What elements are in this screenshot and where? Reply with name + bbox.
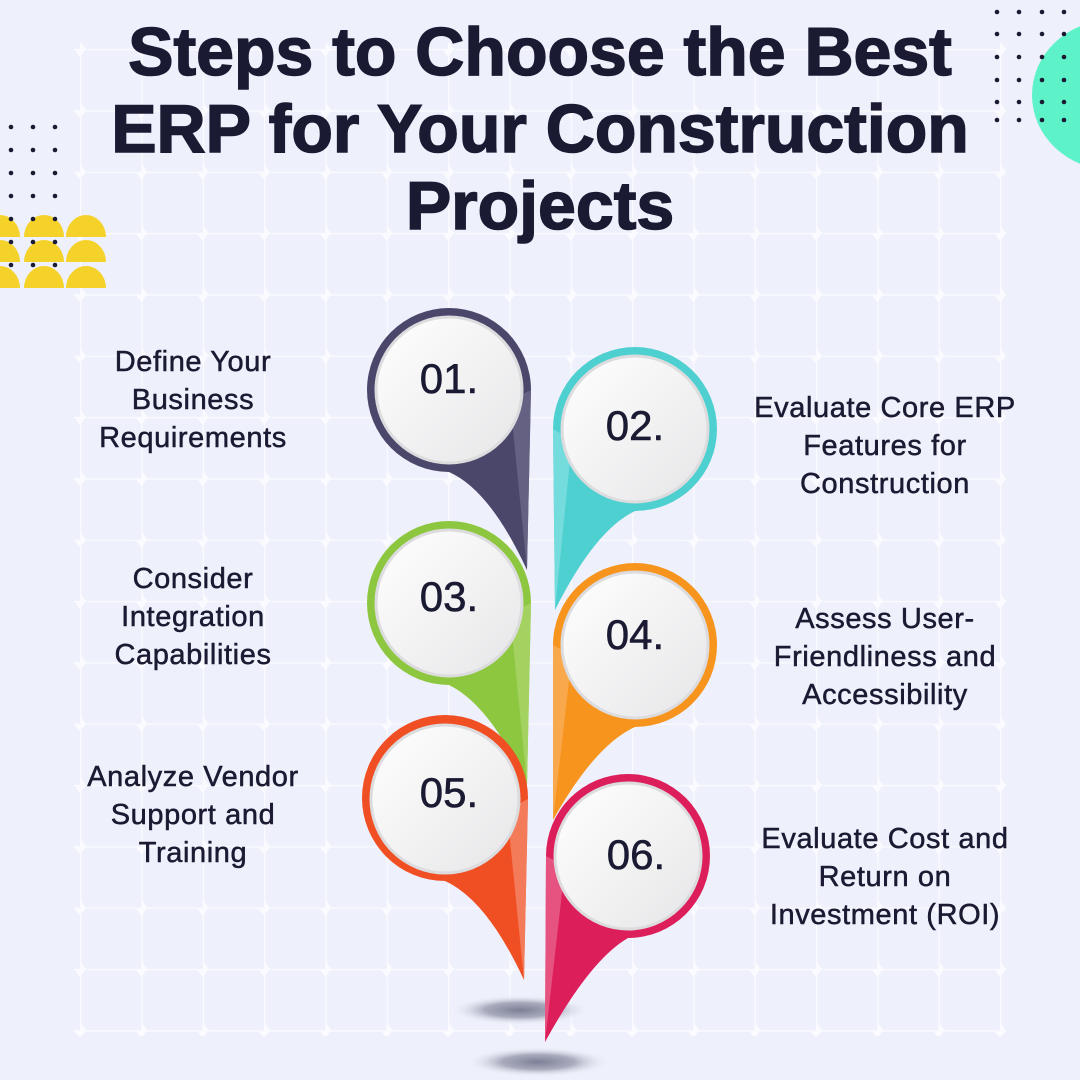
text: step 2: Construction bbox=[800, 468, 970, 500]
pin 02 bbox=[553, 347, 717, 610]
text: step 4 bbox=[774, 603, 996, 711]
text: step 6: Return on bbox=[819, 861, 951, 893]
text: step 6 bbox=[761, 823, 1009, 931]
text: step 5: Analyze Vendor bbox=[87, 761, 299, 793]
pin 03 bbox=[367, 521, 531, 785]
pin 02: 02. bbox=[606, 402, 664, 449]
text: step 3: Capabilities bbox=[114, 639, 272, 671]
pin 05: 05. bbox=[420, 769, 478, 816]
pin 04: 04. bbox=[606, 611, 664, 658]
text: step 5: Support and bbox=[111, 799, 275, 831]
text: step 6: Investment (ROI) bbox=[770, 899, 1000, 931]
text: step 5: Training bbox=[139, 837, 247, 869]
title: ERP for Your Construction bbox=[111, 91, 969, 167]
pin 05 bbox=[362, 715, 528, 980]
shadows bbox=[450, 995, 610, 1077]
text: step 1: Define Your bbox=[115, 346, 271, 378]
text: step 4: Friendliness and bbox=[774, 641, 996, 673]
text: step 3: Integration bbox=[121, 601, 265, 633]
text: step 1: Business bbox=[132, 384, 254, 416]
text: step 2: Features for bbox=[803, 430, 967, 462]
text: step 3: Consider bbox=[133, 563, 253, 595]
pin 04 bbox=[553, 563, 717, 820]
pin 03: 03. bbox=[420, 573, 478, 620]
pin 01: 01. bbox=[420, 355, 478, 402]
decoration: yellow semicircles and left dots bbox=[0, 124, 106, 288]
text: step 4: Accessibility bbox=[802, 679, 968, 711]
text: step 1: Requirements bbox=[99, 422, 287, 454]
text: step 6: Evaluate Cost and bbox=[761, 823, 1009, 855]
title: Projects bbox=[406, 168, 674, 244]
title bbox=[111, 14, 969, 244]
decoration: right dots bbox=[994, 10, 1066, 122]
text: step 2 bbox=[754, 392, 1016, 500]
pin 06 bbox=[545, 774, 710, 1042]
decoration: mint circle bbox=[1032, 20, 1080, 170]
text: step 4: Assess User- bbox=[795, 603, 975, 635]
title: Steps to Choose the Best bbox=[128, 14, 952, 90]
text: step 2: Evaluate Core ERP bbox=[754, 392, 1016, 424]
pin 01 bbox=[367, 308, 531, 570]
text: step 1 bbox=[99, 346, 287, 454]
text: step 3 bbox=[114, 563, 272, 671]
text: step 5 bbox=[87, 761, 299, 869]
pin 06: 06. bbox=[607, 831, 665, 878]
